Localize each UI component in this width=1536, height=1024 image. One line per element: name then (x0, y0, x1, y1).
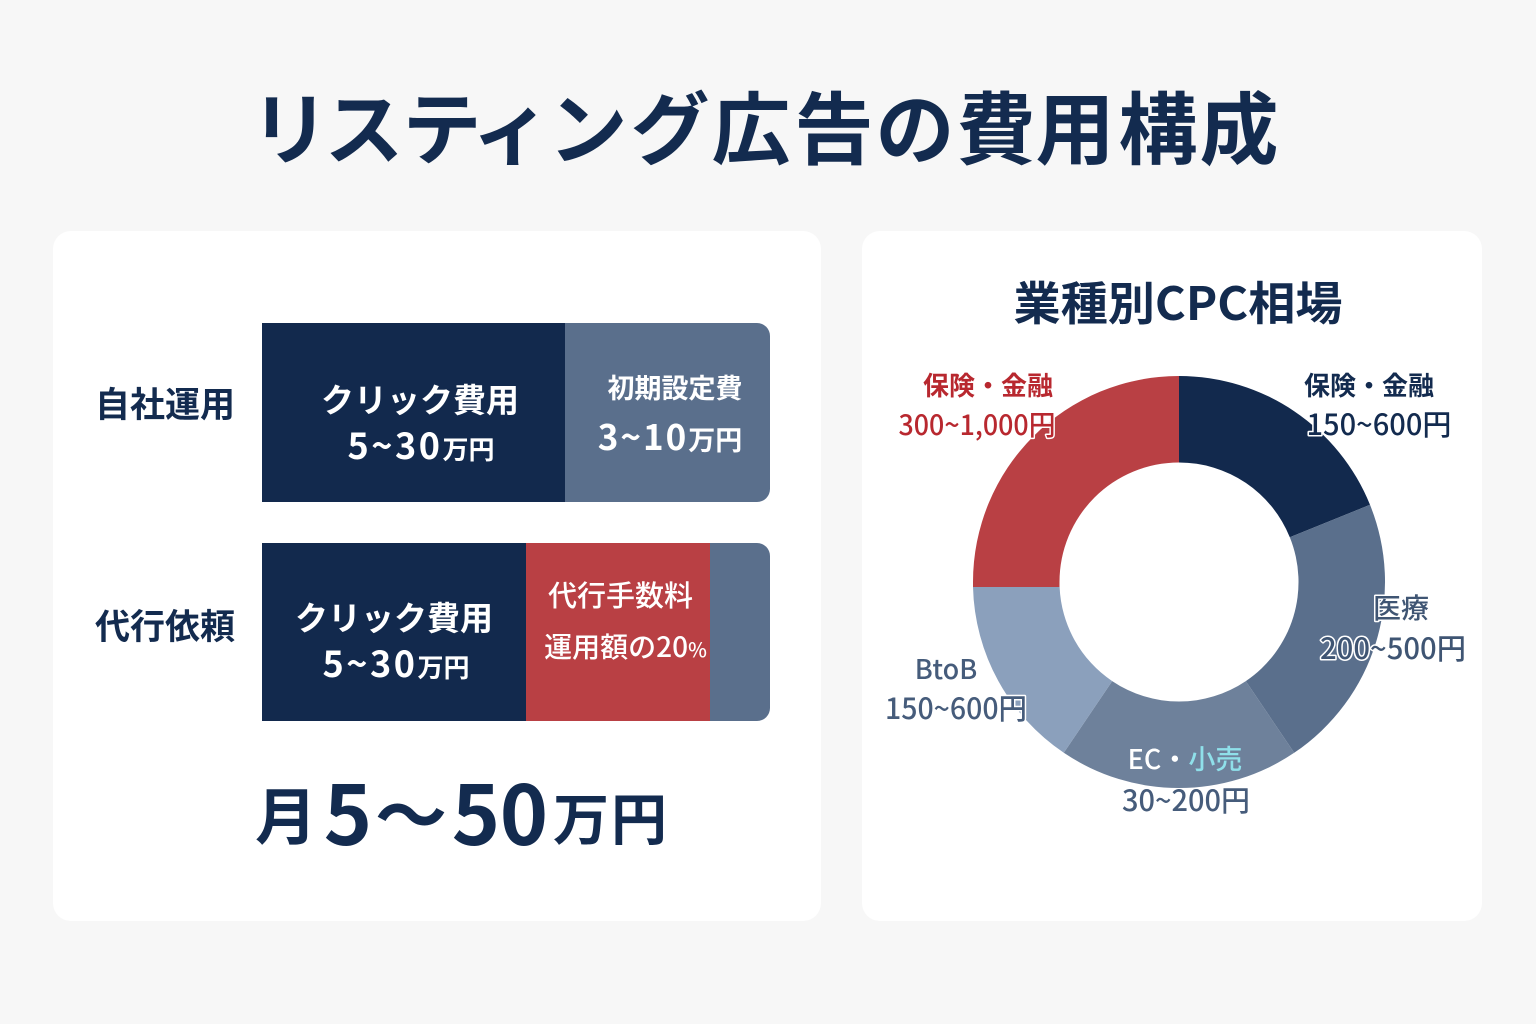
total cost: 月 (255, 767, 317, 857)
label: BtoB: 150~600円 (885, 686, 1027, 728)
segment: insurance and finance red (973, 376, 1179, 587)
segment text: initial setup fee: 初期設定費 (608, 367, 742, 406)
total cost (255, 750, 667, 869)
label: EC and retail: EC・小売 (1128, 738, 1242, 777)
total cost: 万円 (553, 776, 667, 857)
label: EC and retail (1122, 738, 1250, 820)
label: medical (1320, 587, 1466, 668)
panel: CPC by industry (862, 231, 1482, 921)
label: insurance and finance navy: 150~600円 (1306, 402, 1452, 444)
label: insurance and finance red: 300~1,000円 (898, 404, 1056, 444)
stacked bar: in-house (262, 323, 770, 502)
total cost: 〜 (375, 758, 447, 863)
label: medical: 医療 (1373, 587, 1429, 627)
segment: BtoB (973, 587, 1112, 753)
label: BtoB: BtoB (915, 648, 977, 687)
segment: medical (1246, 505, 1385, 753)
donut chart (973, 376, 1385, 788)
row label: agency: 代行依頼 (95, 599, 235, 650)
row label: in-house: 自社運用 (95, 377, 235, 428)
segment text: agency fee rate: 運用額の20% (544, 626, 707, 666)
label: EC and retail: 30~200円 (1122, 778, 1250, 820)
segment text: click cost amount: 5~30万円 (323, 636, 469, 688)
label: medical: 200~500円 (1320, 626, 1466, 668)
segment text: setup fee amount: 3~10万円 (598, 410, 742, 461)
stacked bar: agency (262, 543, 770, 721)
panel heading: 業種別CPC相場 (1014, 268, 1342, 334)
title: リスティング広告の費用構成 (250, 66, 1278, 181)
label: insurance and finance red (898, 366, 1056, 444)
total cost: 550 (324, 750, 548, 869)
segment text: click cost: クリック費用 (295, 592, 493, 640)
segment text: click cost amount: 5~30万円 (348, 418, 494, 470)
label: insurance and finance red: 保険・金融 (923, 366, 1053, 403)
segment: EC and retail (1064, 681, 1294, 788)
label: insurance and finance navy (1304, 366, 1452, 444)
panel: monthly cost comparison (53, 231, 821, 921)
segment: insurance and finance navy (1179, 376, 1370, 537)
segment text: agency fee: 代行手数料 (548, 573, 693, 615)
label: insurance and finance navy: 保険・金融 (1304, 366, 1434, 403)
label: BtoB (885, 648, 1027, 728)
segment text: click cost: クリック費用 (321, 374, 519, 422)
